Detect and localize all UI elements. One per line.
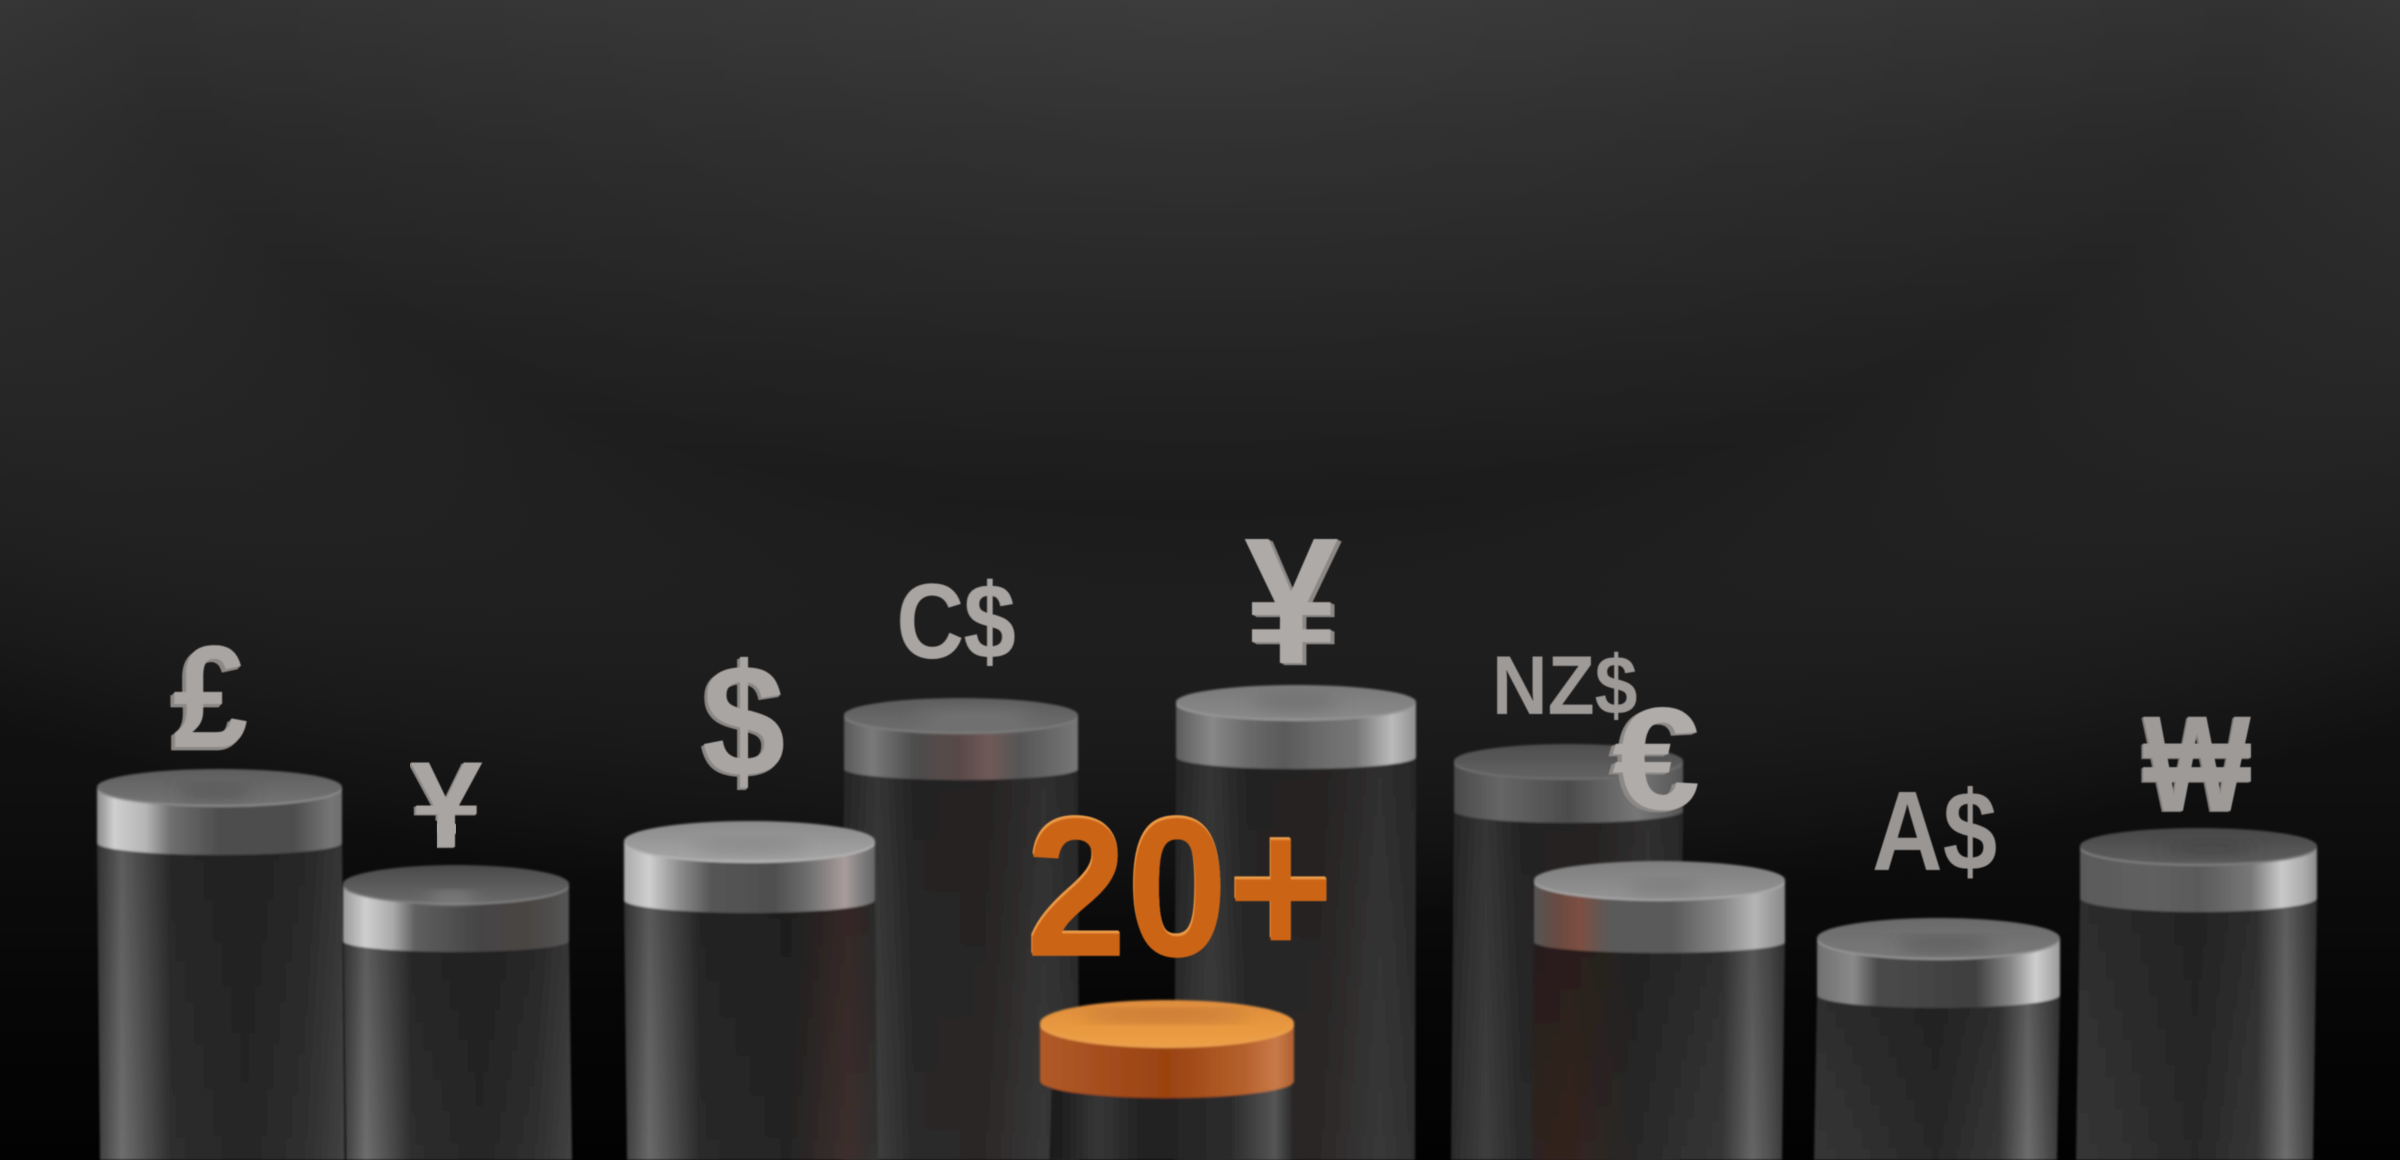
cylinder: pound pedestal <box>97 769 345 1160</box>
cylinder: NZ$ pedestal <box>1451 744 1683 1160</box>
symbol: small yuan: ¥ <box>410 736 483 873</box>
cylinder: dollar pedestal <box>624 821 878 1160</box>
symbol: pound: £ <box>173 615 248 778</box>
cylinder: euro pedestal <box>1533 861 1785 1160</box>
cylinder: orange highlighted pedestal <box>1040 1000 1294 1160</box>
symbol: Australian dollar: A$ <box>1872 768 1997 894</box>
symbol: Canadian dollar: C$ <box>897 562 1016 681</box>
cylinder: large yen pedestal <box>1174 685 1416 1160</box>
headline number: 20+: 20+ <box>1026 779 1334 998</box>
cylinder: won pedestal <box>2076 828 2317 1160</box>
symbol: won: ₩ <box>2143 688 2251 841</box>
symbol: dollar: $ <box>702 630 785 810</box>
cylinder: A$ pedestal <box>1814 918 2060 1160</box>
cylinder: C$ pedestal <box>842 698 1079 1160</box>
cylinder: small yuan pedestal <box>343 865 572 1160</box>
symbol: euro: € <box>1612 677 1701 840</box>
symbol: New Zealand dollar: NZ$ <box>1492 639 1637 732</box>
symbol: large yen: ¥ <box>1244 501 1339 702</box>
